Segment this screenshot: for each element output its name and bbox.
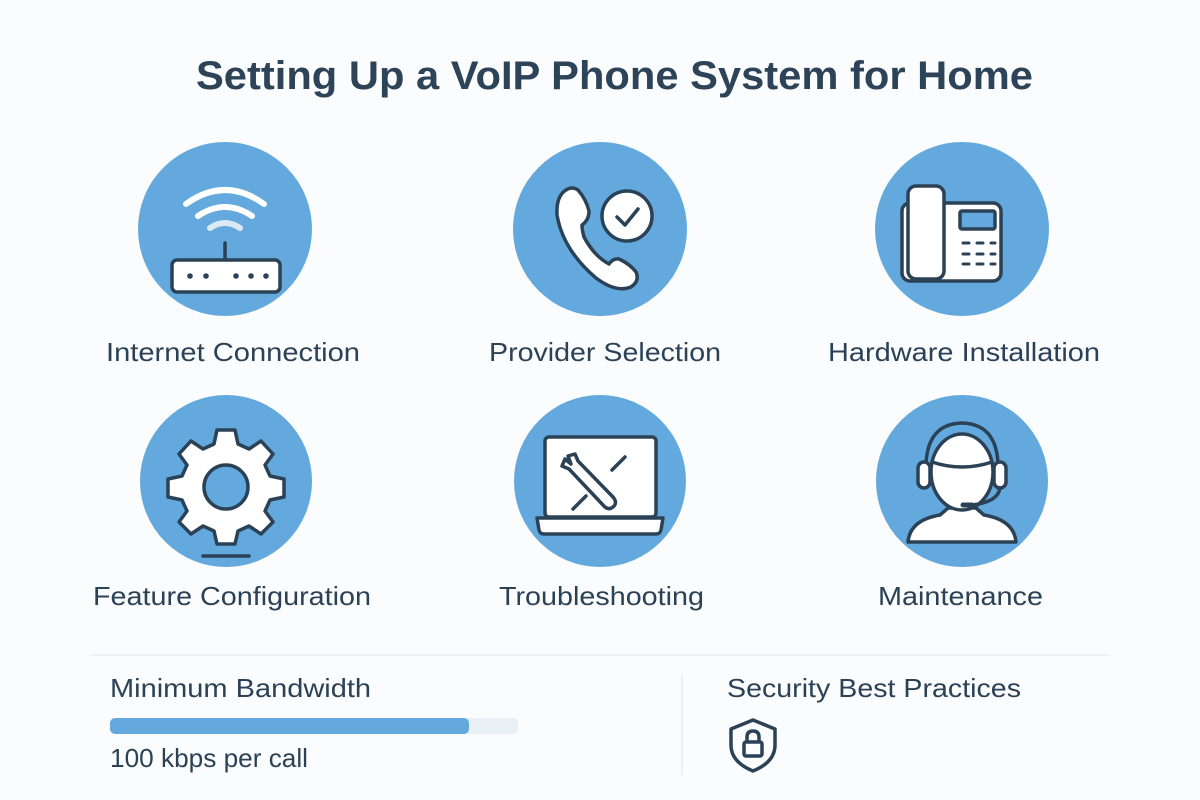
panel: feature configuration <box>93 395 371 611</box>
icon: gear <box>168 430 284 556</box>
panel: security best practices <box>727 673 1021 771</box>
bar chart: bandwidth <box>110 718 518 734</box>
icon: router <box>172 190 280 292</box>
panel: troubleshooting <box>499 395 704 611</box>
panel: troubleshooting: Troubleshooting <box>499 581 704 611</box>
panel: provider selection: Provider Selection <box>489 337 721 367</box>
panel: feature configuration: Feature Configuration <box>93 581 371 611</box>
panel: hardware installation <box>828 142 1100 367</box>
panel: hardware installation: Hardware Installation <box>828 337 1100 367</box>
panel: internet connection <box>106 142 360 367</box>
icon: laptop with tools <box>537 437 663 534</box>
panel: provider selection <box>489 142 721 367</box>
icon: support agent <box>908 423 1016 542</box>
panel: minimum bandwidth: 100 kbps per call <box>110 743 308 773</box>
panel: maintenance <box>876 395 1048 611</box>
icon: desk phone <box>902 186 1001 281</box>
panel: minimum bandwidth: Minimum Bandwidth <box>110 673 371 703</box>
icon: phone with check <box>557 188 652 289</box>
panel: internet connection: Internet Connection <box>106 337 360 367</box>
icon: shield lock <box>731 720 775 771</box>
panel: security best practices: Security Best Practices <box>727 673 1021 703</box>
panel: maintenance: Maintenance <box>878 581 1043 611</box>
panel: minimum bandwidth <box>110 673 518 773</box>
title: Setting Up a VoIP Phone System for Home <box>196 54 1033 98</box>
